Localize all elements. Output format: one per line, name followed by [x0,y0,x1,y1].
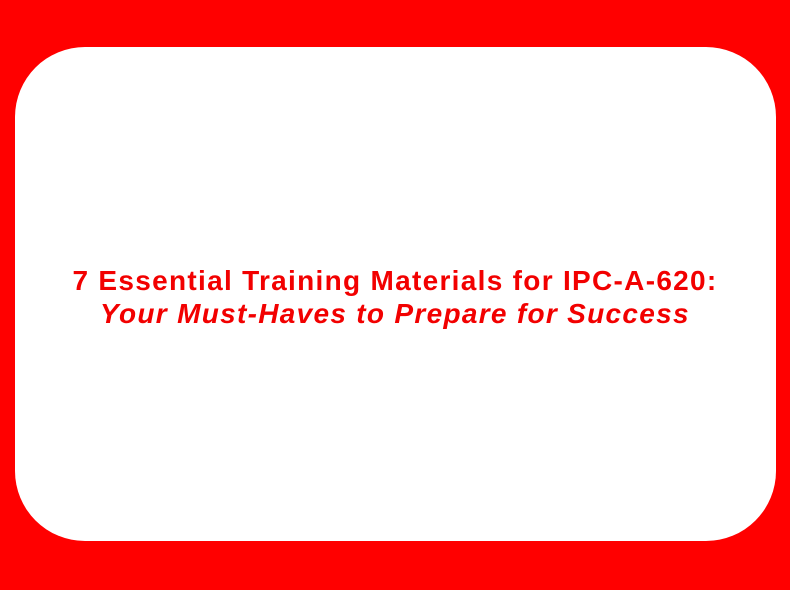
title line 1: 7 Essential Training Materials for IPC-A-620: [72,265,718,296]
subtitle line 2: Your Must-Haves to Prepare for Success [100,298,690,329]
title [72,265,718,329]
